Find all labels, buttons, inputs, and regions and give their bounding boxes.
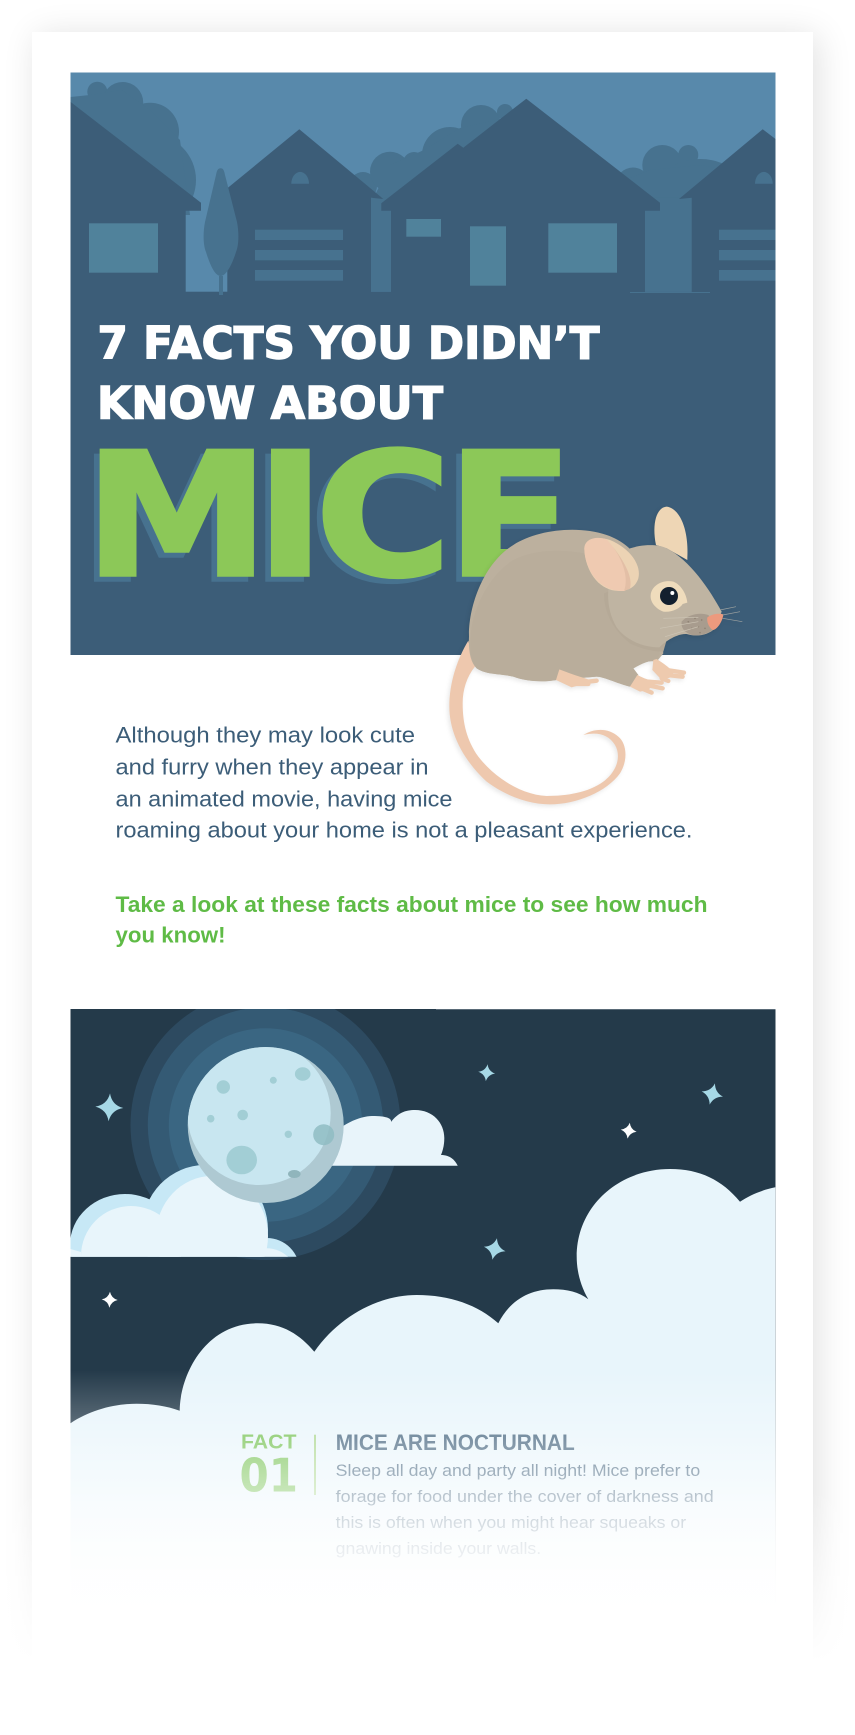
intro paragraph: and furry when they appear in	[116, 754, 428, 779]
tree	[204, 168, 238, 295]
call to action text: you know!	[116, 922, 226, 947]
houses	[70, 99, 790, 292]
small cloud right of moon	[320, 1110, 458, 1166]
windows and doors	[89, 219, 617, 286]
mouse whiskers	[660, 607, 742, 637]
stars	[95, 1063, 726, 1308]
fact heading: MICE ARE NOCTURNAL	[336, 1430, 575, 1455]
mouse nose	[707, 614, 723, 630]
intro paragraph: an animated movie, having mice	[116, 786, 452, 811]
illustration: mouse	[449, 507, 742, 804]
page bottom fade	[0, 1490, 855, 1735]
mouse eye	[651, 581, 687, 612]
panel fade overlay	[70, 1370, 776, 1610]
panel: neighbourhood header	[70, 72, 790, 656]
fact label: FACT	[241, 1431, 296, 1453]
mouse front ear	[584, 538, 639, 591]
fact number: 01	[240, 1449, 298, 1503]
cloud left of moon	[70, 1165, 296, 1257]
fact body text	[336, 1461, 714, 1558]
intro paragraph: Although they may look cute	[116, 722, 415, 747]
bushes behind houses	[70, 82, 732, 292]
mouse muzzle	[682, 614, 717, 635]
word MICE: MICE	[85, 417, 574, 616]
large foreground cloud	[70, 1169, 775, 1610]
intro paragraph	[116, 722, 692, 843]
intro paragraph: roaming about your home is not a pleasant experience.	[116, 818, 692, 843]
fact body text: forage for food under the cover of darkness and	[336, 1487, 714, 1506]
moon	[187, 1042, 344, 1203]
call to action text	[116, 892, 708, 947]
word MICE shadow: MICE	[79, 422, 568, 621]
house silhouettes scene	[70, 72, 790, 656]
mouse back ear	[654, 507, 688, 560]
moon craters	[207, 1067, 334, 1178]
fact body text: this is often when you might hear squeaks or	[336, 1513, 687, 1532]
mouse feet	[556, 659, 684, 693]
moon halo	[130, 990, 400, 1260]
fact divider	[314, 1435, 316, 1495]
title: KNOW ABOUT	[97, 379, 444, 430]
garage slats and attic vents	[255, 172, 779, 293]
mouse tail	[449, 641, 625, 804]
panel: night sky	[70, 1009, 776, 1562]
mouse body	[469, 530, 663, 687]
title: 7 FACTS YOU DIDN’T	[98, 319, 600, 370]
mouse head	[604, 580, 667, 652]
title	[97, 319, 600, 430]
fact body text: gnawing inside your walls.	[336, 1539, 541, 1558]
fact body text: Sleep all day and party all night! Mice prefer to	[336, 1461, 700, 1480]
call to action text: Take a look at these facts about mice to see how much	[116, 892, 708, 917]
